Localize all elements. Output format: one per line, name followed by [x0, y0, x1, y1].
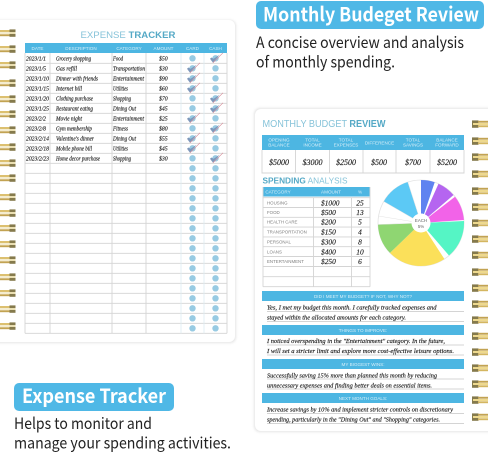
section: did I meet my budget: stayed within the allocated amounts for each category.: [267, 314, 406, 321]
table: budget summary: OPENING: [268, 138, 290, 142]
table: expense rows: Fitness: [112, 126, 129, 132]
table: spending categories: 4: [358, 228, 362, 237]
chart: spending pie: [378, 180, 464, 266]
table: budget summary: EXPENSES: [334, 142, 358, 148]
table: spending categories: FOOD: [267, 210, 280, 215]
section: my biggest wins: [262, 359, 464, 389]
table: spending categories: HOUSING: [267, 200, 288, 205]
table: spending categories: AMOUNT: [321, 190, 341, 194]
table: budget summary: TOTAL: [339, 138, 354, 142]
heading: spending analysis: SPENDING ANALYSIS: [262, 176, 348, 186]
table: spending categories: 8: [358, 237, 362, 246]
table: expense rows: Dining Out: [112, 136, 136, 142]
table: expense rows: Utilities: [113, 86, 129, 92]
table: spending categories: CATEGORY: [265, 190, 291, 194]
text block: expense tracker description: [14, 412, 231, 453]
table: expense rows: $30: [159, 65, 168, 72]
table: expense rows: AMOUNT: [154, 46, 174, 51]
table: expense rows: Dinner with friends: [55, 75, 99, 82]
icon: right spiral binding: [472, 120, 488, 421]
table: expense rows: 2023/2/2: [26, 116, 46, 122]
table: expense rows: Food: [112, 56, 123, 62]
text block: expense tracker description: manage your spending activities.: [14, 432, 231, 453]
text block: monthly budget description: A concise overview and analysis: [256, 31, 464, 53]
text block: expense tracker description: Helps to monitor and: [14, 412, 152, 434]
section: things to improve: [262, 325, 464, 355]
table: expense rows: 2023/1/15: [26, 86, 49, 92]
table: budget summary: $2500: [336, 158, 356, 167]
table: expense rows: 2023/1/10: [26, 76, 49, 82]
table: budget summary: $500: [371, 158, 387, 167]
table: expense rows: $45: [159, 105, 168, 112]
title badge: expense tracker: Expense Tracker: [22, 380, 166, 409]
text block: monthly budget description: of monthly spending.: [256, 50, 395, 72]
table: budget summary: INCOME: [303, 142, 322, 148]
chart: spending pie: EACH: [415, 218, 427, 223]
table: expense rows: Restaurant eating: [55, 106, 93, 112]
table: budget summary: $3000: [302, 158, 322, 167]
table: spending categories: HEALTH CARE: [267, 220, 297, 225]
table: budget summary: $5000: [269, 158, 289, 167]
table: expense rows: Entertainment: [112, 116, 144, 122]
table: budget summary: TOTAL: [305, 138, 320, 142]
text block: monthly budget description: [256, 31, 464, 72]
section: things to improve: I noticed overspending in the "Entertainment" category. In the future,: [266, 338, 445, 345]
table: expense rows: $60: [159, 85, 168, 92]
section: next month goals: [262, 393, 464, 424]
table: spending categories: 5: [358, 218, 362, 227]
table: expense rows: 2023/1/1: [26, 56, 46, 62]
section: next month goals: Increase savings by 10% and implement stricter controls on discretionary: [266, 407, 453, 414]
table: expense rows: Entertainment: [112, 76, 144, 82]
table: spending categories: %: [358, 190, 362, 194]
table: budget summary: SAVINGS: [403, 142, 423, 148]
table: expense rows: 2023/1/5: [26, 66, 46, 72]
table: expense rows: Shopping: [113, 156, 131, 162]
panel: expense tracker page: [0, 20, 236, 343]
section: things to improve: I will set a stricter limit and explore more cost-effective leisure options.: [266, 348, 454, 355]
table: expense rows: CATEGORY: [116, 46, 142, 51]
panel: monthly budget review page: [254, 108, 488, 432]
table: spending categories: $500: [321, 208, 336, 217]
table: spending categories: $400: [321, 247, 336, 256]
table: expense rows: Utilities: [113, 146, 129, 152]
table: spending categories: 10: [356, 247, 364, 256]
table: spending categories: $150: [321, 228, 336, 237]
table: expense rows: Home decor purchase: [55, 156, 100, 162]
table: budget summary: BALANCE: [268, 142, 290, 148]
section: my biggest wins: Successfully saving 15% more than planned this month by reducing: [267, 372, 437, 380]
table: expense rows: $25: [159, 115, 168, 122]
section: next month goals: spending, particularly in the "Dining Out" and "Shopping" categories.: [267, 416, 440, 423]
table: spending categories: 25: [356, 198, 364, 207]
table: expense rows: 2023/2/23: [26, 156, 49, 162]
section: next month goals: NEXT MONTH GOALS:: [339, 396, 387, 401]
table: budget summary: FORWARD: [435, 142, 459, 148]
heading: monthly budget review: MONTHLY BUDGET REVIEW: [262, 119, 386, 130]
table: expense rows: $80: [159, 125, 168, 132]
table: expense rows: $55: [159, 135, 168, 142]
table: spending categories: [263, 187, 370, 287]
table: expense rows: Transportation: [113, 66, 145, 72]
table: spending categories: $300: [321, 237, 336, 246]
table: expense rows: 2023/2/8: [26, 126, 46, 132]
icon: left spiral binding: [0, 29, 16, 330]
table: spending categories: TRANSPORTATION: [267, 230, 307, 235]
table: expense rows: Mobile phone bill: [55, 146, 92, 152]
section: things to improve: THINGS TO IMPROVE:: [339, 328, 387, 333]
table: budget summary: $700: [405, 158, 421, 167]
section: my biggest wins: unnecessary expenses and finding better deals on essential items.: [267, 382, 432, 389]
table: spending categories: 6: [358, 257, 362, 266]
table: budget summary: DIFFERENCE: [365, 140, 394, 146]
table: expense rows: Shopping: [113, 96, 131, 102]
table: expense rows: Gas refill: [56, 65, 77, 72]
section: my biggest wins: MY BIGGEST WINS:: [342, 362, 384, 367]
table: expense rows: $70: [159, 95, 168, 102]
section: did I meet my budget: [262, 291, 464, 322]
table: expense rows: Gym membership: [56, 126, 92, 132]
table: expense rows: $90: [159, 75, 168, 82]
table: expense rows: 2023/1/25: [26, 106, 49, 112]
table: expense rows: Dining Out: [112, 106, 136, 112]
table: expense rows: Valentine's dinner: [56, 136, 95, 142]
table: spending categories: $200: [321, 218, 336, 227]
chart: spending pie: 5%: [418, 224, 424, 229]
section: did I meet my budget: Yes, I met my budget this month. I carefully tracked expenses and: [267, 304, 437, 312]
table: budget summary: $5200: [437, 158, 457, 167]
table: expense rows: 2023/2/18: [26, 146, 49, 152]
table: expense rows: Internet bill: [55, 86, 82, 92]
table: expense rows: CARD: [186, 46, 200, 51]
table: budget summary: [262, 135, 464, 173]
table: expense rows: Grocery shopping: [56, 56, 91, 62]
section: did I meet my budget: DID I MEET MY BUDGET? IF NOT, WHY NOT?: [314, 294, 412, 299]
heading: expense tracker: EXPENSE TRACKER: [80, 30, 175, 41]
table: expense rows: $50: [159, 55, 168, 62]
table: expense rows: DATE: [32, 46, 43, 51]
table: spending categories: LOANS: [267, 249, 282, 254]
table: budget summary: TOTAL: [406, 138, 421, 142]
table: expense rows: $45: [159, 145, 168, 152]
table: expense rows: [25, 43, 227, 333]
table: expense rows: 2023/1/20: [26, 96, 49, 102]
table: expense rows: CASH: [209, 46, 222, 51]
table: expense rows: 2023/2/14: [26, 135, 49, 142]
table: spending categories: $1000: [321, 198, 340, 207]
table: expense rows: Clothing purchase: [56, 96, 93, 102]
table: spending categories: ENTERTAINMENT: [267, 259, 304, 264]
table: expense rows: DESCRIPTION: [65, 46, 97, 51]
table: budget summary: BALANCE: [436, 138, 458, 142]
table: spending categories: $250: [321, 257, 336, 266]
table: spending categories: PERSONAL: [267, 239, 291, 244]
table: spending categories: 13: [356, 208, 364, 217]
table: expense rows: $30: [159, 155, 168, 162]
table: expense rows: Movie night: [55, 116, 82, 122]
